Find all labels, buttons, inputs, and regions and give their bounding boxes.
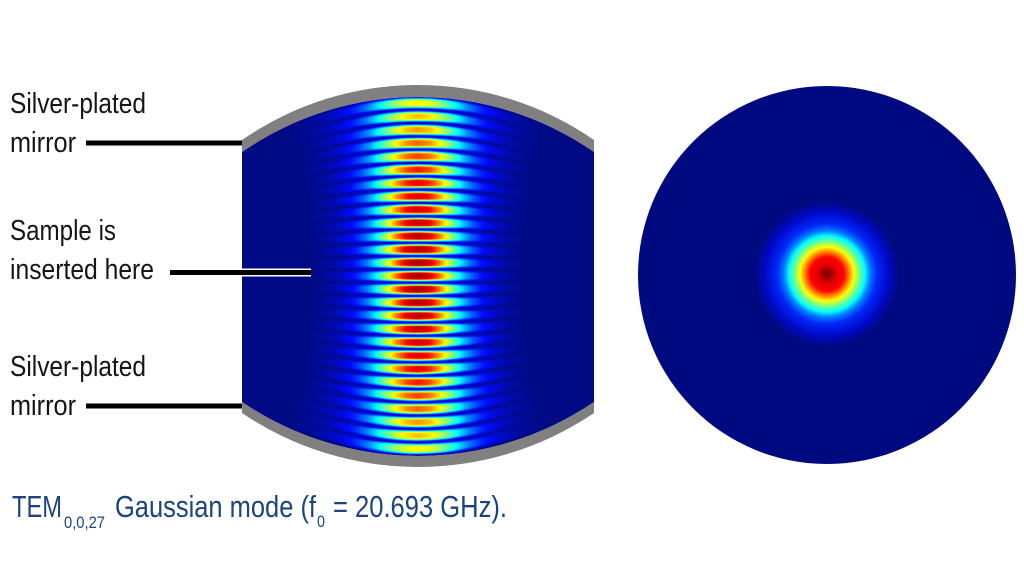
figure: resonator mode diagram [11,85,1016,530]
panel: beam cross-section [638,86,1016,464]
label: top silver-plated mirror: Silver-plated [10,88,146,120]
caption: TEM [12,489,62,524]
caption: Gaussian mode (f [115,489,316,524]
label: bottom silver-plated mirror [10,351,242,422]
standing wave fringes [242,97,594,456]
panel: cavity field side view [242,85,594,467]
label: bottom silver-plated mirror: mirror [10,390,76,422]
circular cross-section [638,86,1016,464]
caption: 0,0,27 [64,513,105,532]
caption: = 20.693 GHz). [333,489,507,524]
label: sample insertion: inserted here [10,254,154,286]
caption [12,489,507,532]
label: bottom silver-plated mirror: Silver-plated [10,351,146,383]
bottom silver-plated mirror [242,402,594,467]
top silver-plated mirror [242,85,594,152]
label: sample insertion [10,215,311,286]
caption: 0 [317,512,325,531]
label: top silver-plated mirror [10,88,242,159]
label: top silver-plated mirror: mirror [10,127,76,159]
label: sample insertion: Sample is [10,215,116,247]
gaussian spot [755,202,899,346]
